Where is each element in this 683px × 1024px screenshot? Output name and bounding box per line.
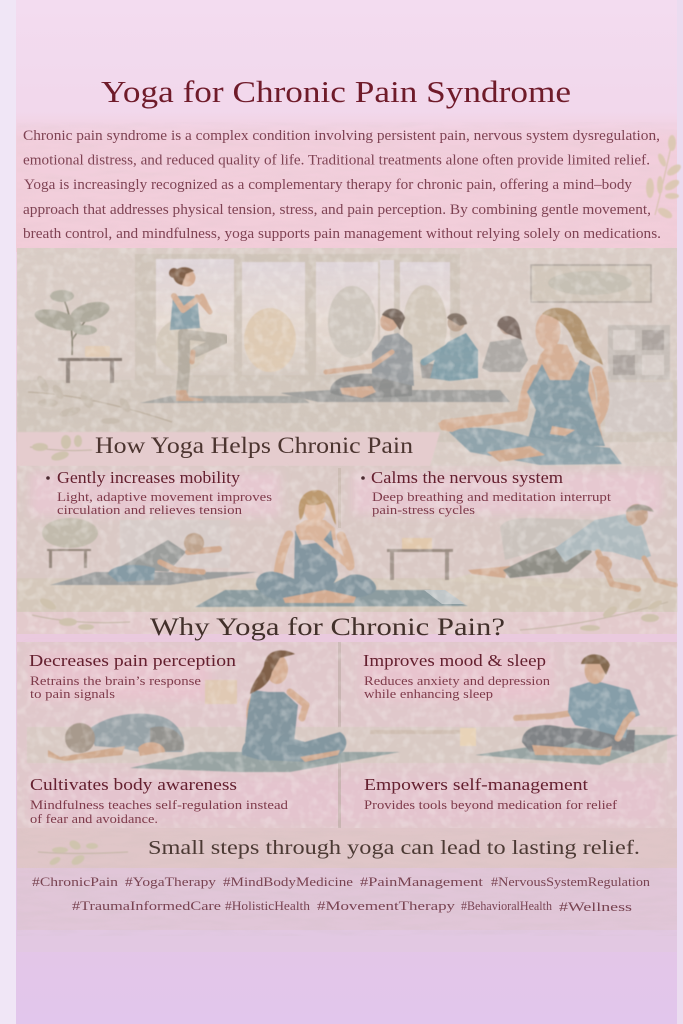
- hero scene illustration: [17, 248, 677, 466]
- figure: foreground woman: [438, 308, 622, 465]
- callout: Empowers self-management: [364, 775, 618, 812]
- callout: Calms the nervous system: Deep breathing and meditation interrupt: [372, 489, 611, 504]
- hashtags: #TraumaInformedCare: [72, 898, 221, 913]
- heading: How Yoga Helps Chronic Pain: How Yoga Helps Chronic Pain: [95, 433, 414, 458]
- icon: plant and table: [32, 290, 122, 383]
- hashtags: #YogaTherapy: [125, 874, 217, 889]
- callout: Empowers self-management: Provides tools beyond medication for relief: [364, 797, 618, 812]
- callout: Improves mood & sleep: [363, 651, 551, 701]
- intro paragraph: Yoga is increasingly recognized as a complementary therapy for chronic pain, offering a mind–body: [24, 177, 633, 193]
- intro paragraph: Chronic pain syndrome is a complex condition involving persistent pain, nervous system dysregulation,: [23, 128, 660, 144]
- callout: Cultivates body awareness: Mindfulness teaches self-regulation instead: [30, 797, 289, 812]
- hashtags: #BehavioralHealth: [461, 898, 552, 913]
- callout: Gently increases mobility: circulation and relieves tension: [57, 502, 243, 517]
- callout: Calms the nervous system: pain-stress cycles: [372, 502, 475, 517]
- figure: woman in grey: [482, 316, 528, 372]
- background room details: [42, 518, 620, 607]
- hashtags: #PainManagement: [360, 874, 483, 889]
- background candles: [205, 680, 476, 746]
- hashtags: #NervousSystemRegulation: [491, 874, 651, 889]
- heading: Why Yoga for Chronic Pain?: Why Yoga for Chronic Pain?: [150, 614, 505, 641]
- floor: [17, 380, 677, 442]
- title: Yoga for Chronic Pain Syndrome: [101, 74, 571, 109]
- callout: Cultivates body awareness: [30, 775, 289, 826]
- heading band: [17, 432, 440, 466]
- figure: child's pose: [48, 714, 184, 761]
- figure: seated man: [326, 309, 414, 398]
- callout: Empowers self-management: Empowers self-management: [364, 775, 588, 794]
- callout: Calms the nervous system: Calms the nervous system: [371, 468, 563, 487]
- callout: Decreases pain perception: to pain signals: [30, 686, 115, 701]
- hashtags: [32, 874, 651, 914]
- figure: man seated with open hand: [516, 654, 640, 756]
- callout: Gently increases mobility: [46, 468, 272, 517]
- hashtags: #Wellness: [559, 899, 632, 914]
- intro paragraph: breath control, and mindfulness, yoga supports pain management without relying solely on medications.: [23, 226, 661, 242]
- hashtags: #MovementTherapy: [317, 898, 456, 913]
- callout: Cultivates body awareness: Cultivates body awareness: [30, 775, 237, 794]
- mat right: [475, 735, 678, 765]
- hashtags: #MindBodyMedicine: [223, 874, 353, 889]
- callout: Improves mood & sleep: while enhancing sleep: [364, 686, 493, 701]
- icon: leaf sprigs by heading: [32, 596, 668, 631]
- item: folded towel: [424, 590, 465, 604]
- hashtags: #ChronicPain: [32, 874, 119, 889]
- intro paragraph: [23, 128, 661, 242]
- figure: resting man on left: [108, 533, 219, 582]
- icon: leaf sprig in scene: [28, 374, 172, 424]
- icon: leaf sprig beside intro: [646, 135, 683, 220]
- painting on wall: [531, 265, 651, 302]
- icon: leaf sprig by tagline: [38, 839, 128, 867]
- figure: centre woman with hand on chest: [256, 490, 376, 603]
- callout: Cultivates body awareness: of fear and avoidance.: [30, 811, 158, 826]
- icon: small leaf sprig by heading: [30, 435, 92, 462]
- callout: Gently increases mobility: Gently increases mobility: [57, 468, 241, 487]
- callout: Calms the nervous system: [361, 468, 611, 517]
- intro paragraph: emotional distress, and reduced quality of life. Traditional treatments alone often provide limited relief.: [23, 152, 650, 168]
- intro paragraph: approach that addresses physical tension, stress, and pain perception. By combining gentle movement,: [23, 202, 651, 218]
- figure: woman seated with hand on chest: [242, 650, 346, 762]
- callout: Decreases pain perception: Retrains the brain’s response: [30, 673, 201, 688]
- panel: why yoga: [17, 642, 678, 828]
- callout: Gently increases mobility: Light, adaptive movement improves: [57, 489, 272, 504]
- tagline: Small steps through yoga can lead to lasting relief.: [148, 837, 640, 859]
- figure: man stretching on right: [468, 504, 675, 589]
- callout: Decreases pain perception: Decreases pain perception: [29, 651, 236, 670]
- window wall: [135, 254, 460, 382]
- mats: [140, 390, 510, 403]
- mat under figures: [130, 752, 400, 772]
- hashtags: #HolisticHealth: [225, 898, 311, 913]
- callout: Improves mood & sleep: Reduces anxiety and depression: [364, 673, 551, 688]
- figure: man in blue: [420, 313, 478, 381]
- panel: how yoga helps: [17, 466, 677, 634]
- bookshelf: [605, 325, 673, 432]
- figure: tree pose woman: [169, 267, 224, 401]
- callout: Decreases pain perception: [29, 651, 236, 701]
- callout: Improves mood & sleep: Improves mood & sleep: [363, 651, 546, 670]
